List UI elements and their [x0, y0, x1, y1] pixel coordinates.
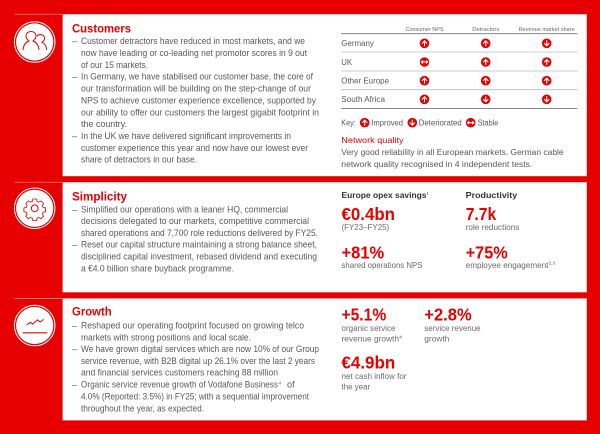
text block: network quality: network quality recognised in 4 independent tests. [341, 160, 532, 169]
text block: customers bullets: In the UK we have delivered significant improvements in [81, 131, 291, 141]
row icons: UK [420, 57, 552, 67]
text block: simplicity bullets: Simplified our operations with a leaner HQ, commercial [81, 204, 288, 214]
stats: Europe opex savings: Europe opex savings [342, 190, 427, 200]
stats: Europe opex savings: shared operations NPS [342, 261, 422, 270]
table: market performance: Consumer NPS [406, 27, 444, 33]
table: market performance: Other Europe [341, 77, 390, 86]
row icons: Germany [420, 38, 552, 48]
text block: growth bullets: service revenue, with B2B digital up 26.1% over the last 2 years [81, 356, 315, 366]
text block: network quality: Very good reliability in all European markets. German cable [341, 148, 564, 157]
stat: service revenue growth [424, 304, 481, 344]
stats: productivity [466, 190, 556, 270]
text block: customers bullets: now have leading or co-leading net promotor scores in 9 out [81, 48, 307, 58]
text block: growth bullets: markets with strong positions and local scale. [81, 332, 251, 342]
text block: growth bullets: Reshaped our operating footprint focused on growing telco [81, 320, 304, 330]
legend: key [341, 118, 499, 128]
stats: Europe opex savings: (FY23–FY25) [342, 223, 390, 232]
panel: customers [14, 14, 587, 176]
text block: growth bullets: 4 [278, 380, 282, 386]
stat: net cash inflow: net cash inflow for [342, 372, 407, 381]
stat: service revenue growth: +2.8% [424, 304, 472, 324]
text block: customers bullets: our transformation will be building on the step-change of our [81, 84, 311, 94]
text block: network quality: Network quality [341, 135, 404, 145]
stat: organic service revenue growth: +5.1% [342, 304, 387, 324]
text block: simplicity bullets: Reset our capital structure maintaining a strong balance sheet, [81, 240, 317, 250]
stat: organic service revenue growth: 4 [399, 334, 402, 340]
stats: productivity: 2,3 [549, 260, 556, 266]
text block: growth bullets: We have grown digital services which are now 10% of our Group [81, 344, 319, 354]
text block: simplicity bullets: shared operations and 7,700 role reductions delivered by FY25. [81, 228, 318, 238]
stats: productivity: role reductions [466, 223, 519, 232]
text block: customers bullets: – [72, 72, 78, 82]
text block: growth bullets: 4.0% (Reported: 3.5%) in FY25; with a sequential improvement [81, 391, 309, 401]
stats: productivity: Productivity [466, 190, 518, 200]
stat: organic service revenue growth [342, 304, 402, 344]
stat: organic service revenue growth: organic service [342, 324, 396, 333]
text block: customers bullets: – [72, 36, 78, 46]
text block: growth bullets: – [72, 344, 78, 354]
legend: key: Stable [478, 119, 499, 128]
text block: customers bullets: customer experience this year and now have our lowest ever [81, 143, 308, 153]
heading: customers: Customers [72, 21, 131, 35]
text block: growth bullets: of [287, 380, 295, 390]
legend: key: Key: [341, 119, 356, 128]
stats: productivity: employee engagement [466, 261, 549, 270]
table: market performance: UK [341, 58, 353, 67]
stats: productivity: +75% [466, 242, 508, 262]
text block: simplicity bullets [72, 204, 318, 274]
text block: growth bullets: and financial services customers reaching 88 million [81, 368, 278, 378]
legend: key: Improved [371, 119, 403, 128]
stat: service revenue growth: growth [424, 335, 449, 344]
row icons: South Africa [420, 94, 552, 104]
text block: customers bullets: In Germany, we have stabilised our customer base, the core of [81, 72, 313, 82]
heading: simplicity: Simplicity [72, 190, 127, 204]
stat: net cash inflow: the year [342, 383, 371, 392]
text block: customers bullets: NPS to achieve customer experience excellence, supported by [81, 96, 316, 106]
stat: net cash inflow: €4.9bn [342, 352, 395, 372]
text block: network quality [341, 135, 564, 169]
text block: growth bullets: Organic service revenue growth of Vodafone Business [81, 380, 278, 390]
text block: customers bullets: of our 15 markets. [81, 60, 148, 70]
stats: Europe opex savings: 1 [426, 191, 430, 196]
stats: Europe opex savings [342, 190, 430, 270]
text block: customers bullets: share of detractors in our base. [81, 155, 197, 165]
table: market performance: South Africa [341, 95, 386, 104]
text block: customers bullets: Customer detractors have reduced in most markets, and we [81, 36, 305, 46]
text block: simplicity bullets: disciplined capital investment, rebased dividend and executing [81, 252, 317, 262]
stat: organic service revenue growth: revenue growth [342, 335, 399, 344]
panel: simplicity [14, 182, 587, 292]
text block: simplicity bullets: decisions delegated to our markets, competitive commercial [81, 216, 309, 226]
stats: Europe opex savings: +81% [342, 242, 385, 262]
text block: simplicity bullets: – [72, 240, 78, 250]
icon: gear [14, 188, 55, 229]
text block: customers bullets: our ability to offer our customers the largest gigabit footprint in [81, 107, 319, 117]
text block: customers bullets: the country. [81, 119, 127, 129]
icon: customers [14, 22, 55, 62]
text block: customers bullets: – [72, 131, 78, 141]
table: market performance: Detractors [472, 27, 500, 33]
text block: customers bullets [72, 36, 319, 165]
text block: growth bullets: throughout the year, as expected. [81, 403, 204, 413]
text block: simplicity bullets: – [72, 204, 78, 214]
stats: Europe opex savings: €0.4bn [342, 204, 395, 224]
stats: productivity: 7.7k [466, 204, 496, 224]
text block: growth bullets: – [72, 380, 78, 390]
legend: key: Deteriorated [419, 119, 462, 128]
icon: growth chart [14, 305, 55, 346]
stat: service revenue growth: service revenue [424, 324, 481, 333]
table: market performance: Revenue market share [519, 27, 575, 33]
table: market performance [341, 27, 578, 108]
panel: growth [14, 298, 587, 420]
row icons: Other Europe [420, 76, 552, 85]
table: market performance: Germany [341, 39, 374, 48]
text block: simplicity bullets: a €4.0 billion share buyback programme. [81, 264, 234, 274]
stat: net cash inflow [342, 352, 407, 392]
text block: growth bullets: – [72, 320, 78, 330]
heading: growth: Growth [72, 305, 112, 319]
text block: growth bullets [72, 320, 319, 413]
